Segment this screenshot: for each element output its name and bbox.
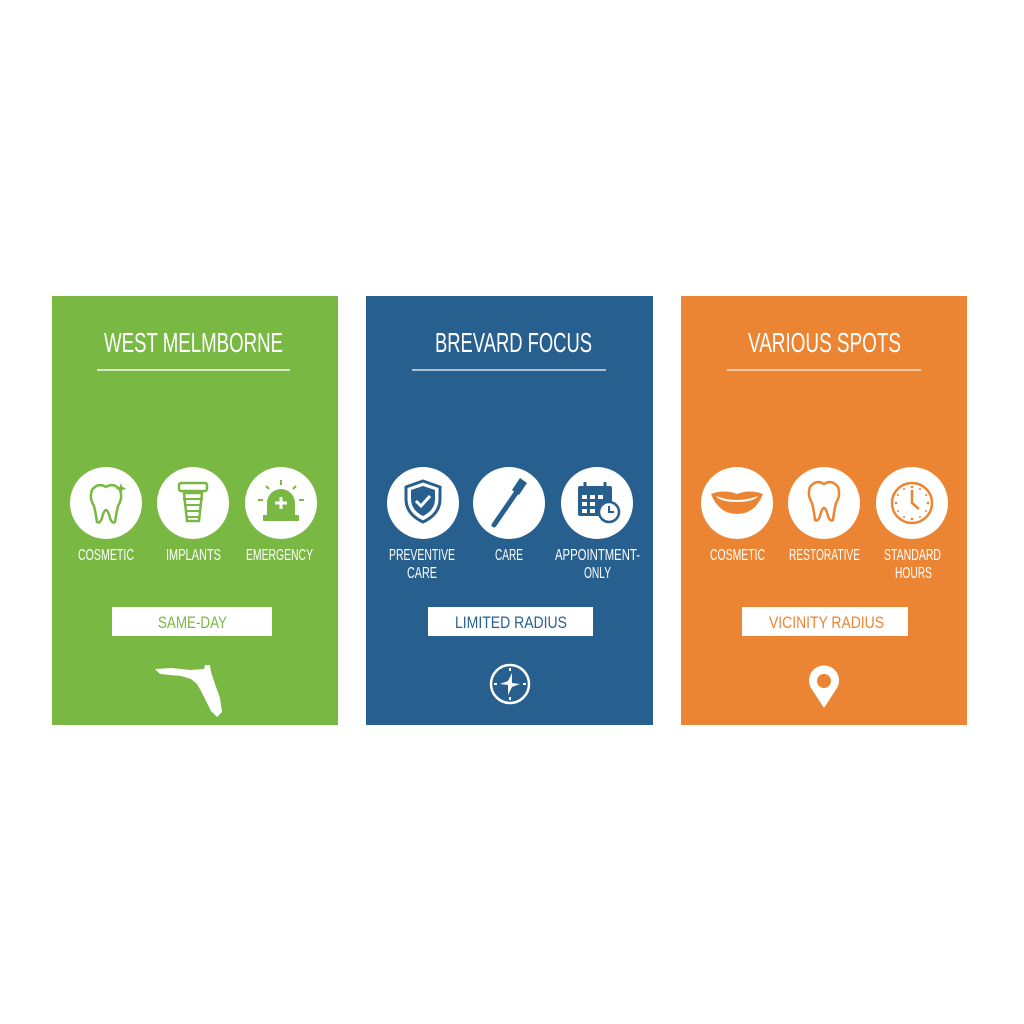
label: emergency: EMERGENCY: [246, 547, 313, 564]
label: preventive care: [389, 547, 455, 582]
panel: brevard focus: [366, 296, 653, 725]
heading: various spots: VARIOUS SPOTS: [748, 327, 901, 358]
label: appointment-only: ONLY: [584, 565, 611, 582]
icon: tooth: [788, 467, 860, 539]
badge: limited radius: [428, 607, 593, 636]
badge: limited radius: LIMITED RADIUS: [455, 613, 567, 632]
label: preventive care: CARE: [407, 565, 437, 582]
label: restorative: RESTORATIVE: [789, 547, 860, 564]
label: preventive care: PREVENTIVE: [389, 547, 455, 564]
label: standard hours: HOURS: [895, 565, 932, 582]
icon: implant: [157, 467, 229, 539]
heading: brevard focus: BREVARD FOCUS: [435, 327, 592, 358]
icon: calendar clock: [561, 467, 633, 539]
icon: emergency siren: [245, 467, 317, 539]
icon: smile: [701, 467, 773, 539]
badge: same-day: SAME-DAY: [158, 613, 227, 632]
badge: vicinity radius: VICINITY RADIUS: [769, 613, 884, 632]
label: standard hours: [884, 547, 941, 582]
icon: shield: [387, 467, 459, 539]
label: implants: IMPLANTS: [166, 547, 221, 564]
label: appointment-only: [555, 547, 640, 582]
label: cosmetic: COSMETIC: [78, 547, 134, 564]
icon: clock: [876, 467, 948, 539]
label: appointment-only: APPOINTMENT-: [555, 547, 640, 564]
icon: toothbrush: [473, 467, 545, 539]
badge: vicinity radius: [742, 607, 908, 636]
heading: west melbourne: WEST MELMBORNE: [104, 327, 283, 358]
icon: cosmetic tooth: [70, 467, 142, 539]
panel: various spots: [681, 296, 967, 725]
icon: florida: [155, 665, 222, 717]
icon: compass: [491, 665, 529, 703]
badge: same-day: [112, 607, 272, 636]
label: standard hours: STANDARD: [884, 547, 941, 564]
panel: west melbourne: [52, 296, 338, 725]
label: cosmetic: COSMETIC: [710, 547, 765, 564]
label: care: CARE: [495, 547, 523, 564]
icon: map pin: [809, 666, 839, 708]
